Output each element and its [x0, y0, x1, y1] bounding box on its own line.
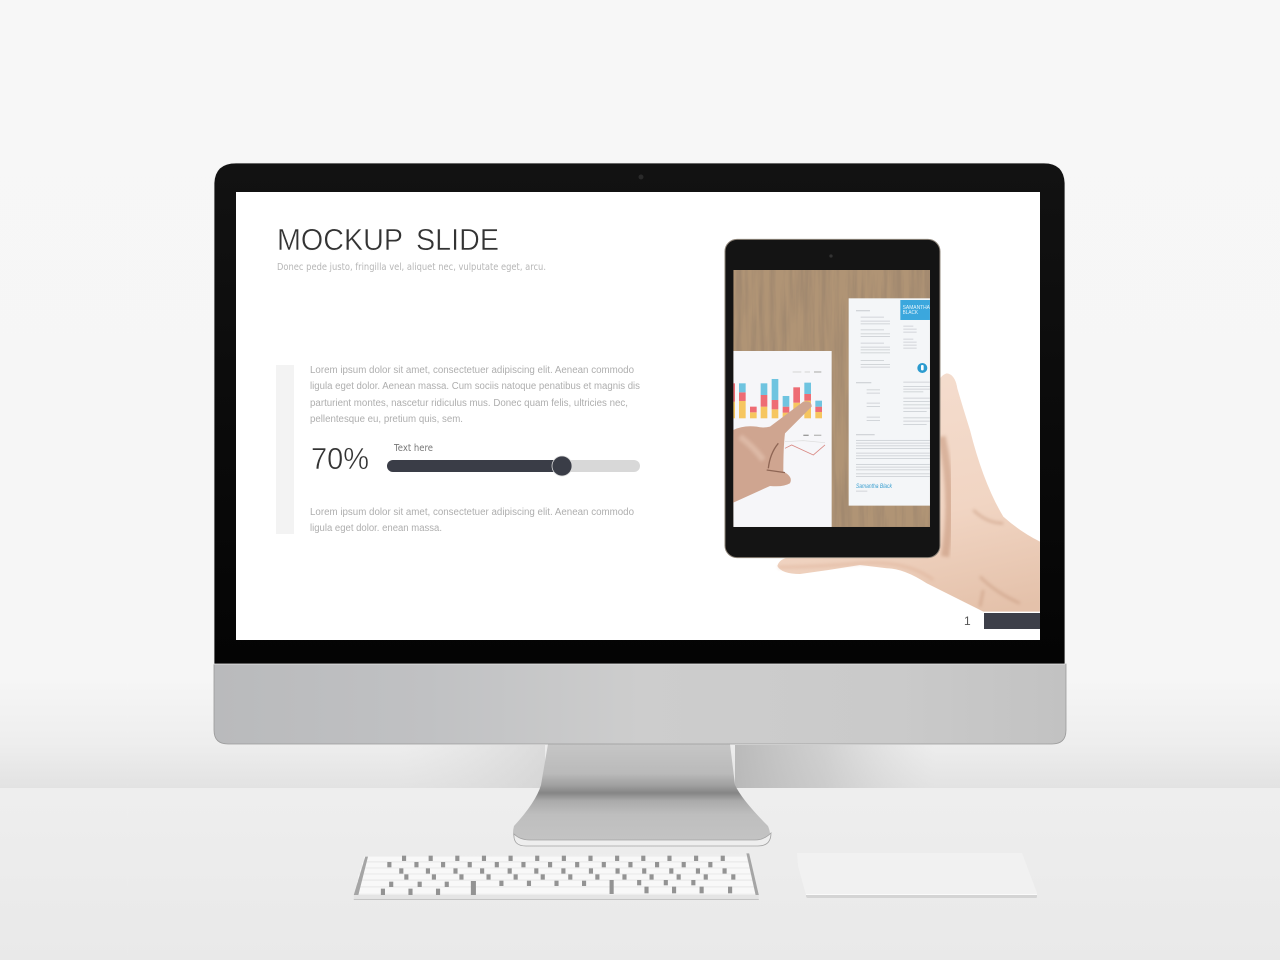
tablet camera — [829, 254, 833, 258]
monitor chin — [214, 664, 1066, 744]
page number: 1 — [964, 614, 971, 628]
left chart paper — [733, 351, 832, 527]
lower paragraph — [310, 507, 635, 534]
pointing hand in photo — [733, 401, 812, 503]
body paragraph — [310, 365, 640, 425]
trackpad — [797, 853, 1037, 898]
subtitle: Donec pede justo, fringilla vel, aliquet nec, vulputate eget, arcu. — [277, 262, 546, 273]
body paragraph: ligula eget dolor. Aenean massa. Cum sociis natoque penatibus et magnis dis — [310, 381, 640, 392]
lower paragraph: Lorem ipsum dolor sit amet, consectetuer adipiscing elit. Aenean commodo — [310, 507, 635, 518]
keyboard key gaps — [381, 856, 735, 895]
resume text lines — [856, 310, 930, 492]
line chart — [785, 445, 825, 455]
body paragraph: parturient montes, nascetur ridiculus mus. Donec quam felis, ultricies nec, — [310, 398, 628, 409]
signature: Samantha Black — [856, 484, 893, 490]
tablet photo: BLACK — [903, 310, 918, 316]
title: MOCKUP SLIDE — [277, 222, 499, 257]
hand — [777, 373, 1040, 612]
lower paragraph: ligula eget dolor. enean massa. — [310, 523, 442, 534]
slide screen — [236, 192, 1040, 640]
webcam — [638, 174, 644, 180]
slider label: Text here — [393, 443, 433, 454]
resume paper — [849, 298, 930, 506]
monitor — [214, 163, 1066, 846]
body paragraph: pellentesque eu, pretium quis, sem. — [310, 414, 463, 425]
resume profile icon — [917, 363, 927, 373]
hand and tablet — [725, 239, 1040, 612]
tablet photo: SAMANTHA — [903, 305, 930, 311]
tablet photo — [733, 270, 930, 527]
bar chart — [733, 371, 822, 436]
footer bar — [984, 613, 1040, 629]
monitor stand — [513, 744, 771, 846]
tablet body — [725, 239, 940, 558]
body paragraph: Lorem ipsum dolor sit amet, consectetuer adipiscing elit. Aenean commodo — [310, 365, 635, 376]
percentage: 70% — [311, 441, 369, 476]
resume header — [900, 300, 930, 320]
monitor bezel — [214, 163, 1065, 664]
keyboard — [354, 853, 759, 900]
side accent bar — [276, 365, 294, 534]
slider — [387, 456, 640, 476]
